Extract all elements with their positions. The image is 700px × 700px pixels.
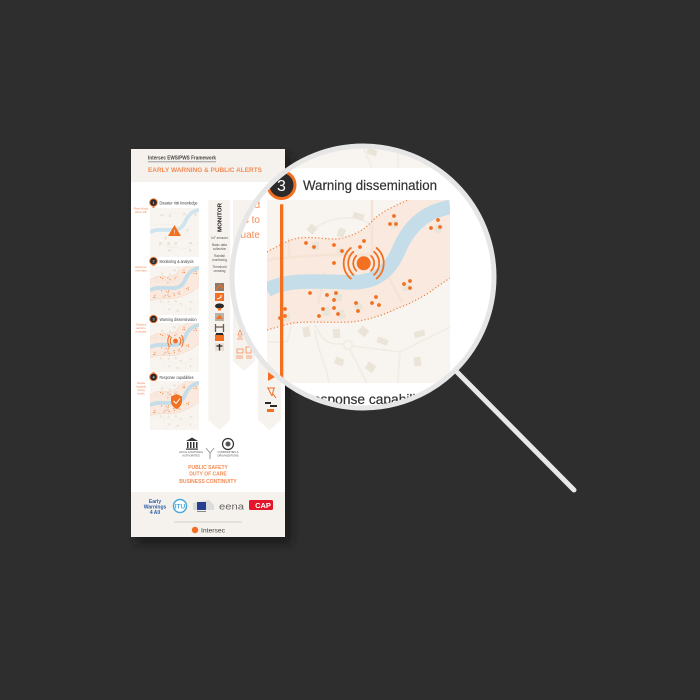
step 4: response capabilities: during bbox=[137, 388, 145, 392]
stakeholders: ORGANIZATIONS bbox=[217, 454, 239, 458]
number badge 3: 3 bbox=[277, 178, 286, 195]
step 2: monitoring and analysis: field data bbox=[136, 268, 147, 272]
number badge 3 bbox=[268, 172, 295, 198]
logo: early warnings for all: Early bbox=[149, 499, 161, 505]
logo: EU bbox=[193, 500, 214, 512]
step 4: response capabilities: floods bbox=[137, 392, 145, 396]
column: monitor: Basic data bbox=[212, 243, 227, 247]
magnified map bbox=[267, 200, 450, 383]
goals text: PUBLIC SAFETY bbox=[188, 465, 229, 471]
logo: ITU bbox=[174, 500, 186, 512]
step 2: monitoring and analysis: Real-time bbox=[135, 265, 147, 269]
timeline spine bbox=[153, 202, 154, 377]
panel: poster bbox=[131, 149, 285, 537]
step 4: response capabilities: People bbox=[137, 381, 146, 385]
column: monitor: MONITOR bbox=[218, 203, 224, 232]
icon: authorities building bbox=[186, 438, 198, 450]
respond icons bbox=[265, 372, 277, 412]
logo: CAP: CAP bbox=[255, 501, 271, 510]
logo: ITU: ITU bbox=[175, 504, 186, 510]
stakeholders: COMMUNITIES & bbox=[218, 450, 239, 454]
step 4: response capabilities: Upgrade bbox=[136, 384, 147, 388]
poster drop shadow bbox=[136, 155, 291, 544]
step 3: warning dissemination: alerts to bbox=[136, 326, 146, 330]
magnified side text bbox=[241, 201, 260, 238]
stakeholders: AUTHORITIES bbox=[182, 454, 200, 458]
column: monitor bbox=[208, 200, 230, 430]
magnifier lens bbox=[232, 140, 494, 408]
step 2: monitoring and analysis bbox=[135, 257, 199, 315]
step 3: warning dissemination: evacuate bbox=[136, 330, 147, 334]
column: monitor: Rainfall bbox=[214, 254, 225, 258]
previous map fragment bbox=[296, 148, 430, 168]
goals text bbox=[179, 465, 237, 485]
alert orange icons bbox=[236, 330, 252, 358]
step 3: warning dissemination: Warning dissemination bbox=[160, 317, 197, 322]
logo: early warnings for all: 4 All bbox=[150, 510, 161, 516]
icon: connector bbox=[206, 448, 214, 459]
step 4: response capabilities bbox=[136, 373, 199, 430]
column: monitor: collection bbox=[213, 247, 226, 251]
poster header: Intersec EWS/PWS Framework bbox=[148, 156, 216, 162]
stakeholders: LOCAL & NATIONAL bbox=[179, 450, 204, 454]
step 1: disaster risk knowledge bbox=[134, 199, 199, 257]
heading: warning dissemination: Warning dissemination bbox=[303, 177, 437, 193]
step 3: warning dissemination: 3 bbox=[152, 318, 155, 322]
step 4: response capabilities: Response capabilities bbox=[160, 375, 194, 380]
column: alert bbox=[233, 200, 255, 371]
icon: broadcast signal bbox=[344, 248, 384, 279]
logo: early warnings for all: Warnings bbox=[144, 504, 167, 510]
logo: Intersec bbox=[192, 527, 226, 534]
timeline spine magnified bbox=[280, 204, 283, 378]
poster header bbox=[131, 149, 285, 182]
step 3: warning dissemination bbox=[136, 315, 199, 372]
column: monitor: IoT sensors bbox=[211, 236, 228, 240]
step 2: monitoring and analysis: 2 bbox=[152, 260, 155, 264]
goals text: BUSINESS CONTINUITY bbox=[179, 479, 237, 485]
step 1: disaster risk knowledge: Flash floods bbox=[134, 206, 149, 210]
logo: early warnings for all bbox=[144, 499, 167, 516]
magnified side text: d bbox=[254, 200, 260, 211]
goals text: DUTY OF CARE bbox=[189, 472, 227, 478]
logo: eena: eena bbox=[219, 502, 245, 512]
stakeholders bbox=[179, 438, 239, 459]
logo: Intersec: Intersec bbox=[201, 528, 226, 534]
footer bbox=[131, 492, 285, 537]
column: monitor: crossing bbox=[214, 269, 226, 273]
column: monitor: Threshold bbox=[212, 265, 227, 269]
logo: CAP bbox=[249, 500, 273, 510]
heading: response capabilities: Response capabilities bbox=[303, 391, 437, 407]
poster header: EARLY WARNING & PUBLIC ALERTS bbox=[148, 167, 262, 174]
column: respond bbox=[258, 200, 281, 430]
magnifier handle bbox=[454, 369, 574, 490]
step 1: disaster risk knowledge: Disaster risk knowledge bbox=[160, 200, 198, 206]
magnified side text: uate bbox=[241, 230, 260, 241]
step 1: disaster risk knowledge: 1 bbox=[152, 201, 155, 205]
icon: communities globe bbox=[222, 438, 234, 450]
step 1: disaster risk knowledge: ! bbox=[174, 230, 176, 236]
step 4: response capabilities: 4 bbox=[152, 376, 155, 380]
step 3: warning dissemination: Targeted bbox=[136, 322, 147, 326]
column: monitor: monitoring bbox=[212, 258, 227, 262]
step 2: monitoring and analysis: Monitoring & analysis bbox=[160, 259, 194, 264]
monitor icons bbox=[215, 283, 224, 351]
step 1: disaster risk knowledge: within 24h bbox=[135, 210, 148, 214]
magnified side text: s to bbox=[244, 215, 260, 226]
